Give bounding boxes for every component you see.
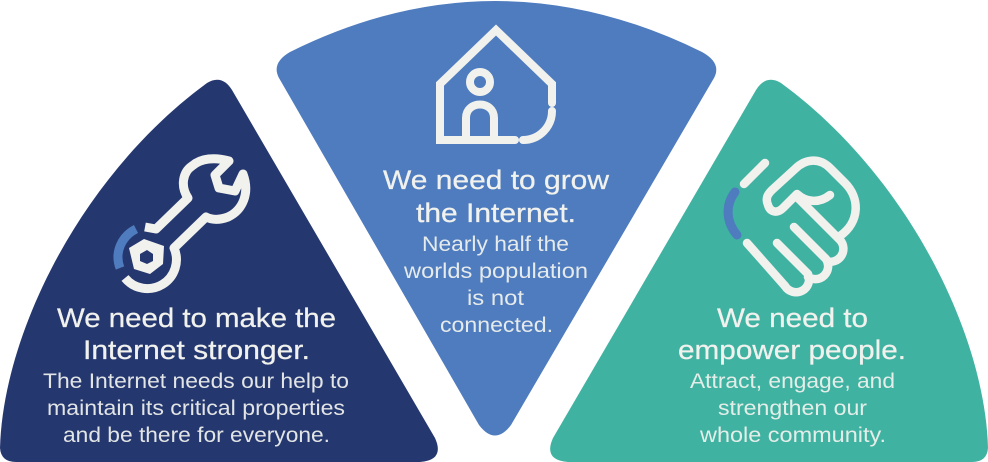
panel: empower people — [550, 80, 988, 462]
body text: empower people: whole community. — [699, 423, 886, 447]
heading: make the Internet stronger: We need to make the — [57, 303, 336, 333]
body text: empower people: Attract, engage, and — [690, 369, 895, 393]
heading: make the Internet stronger — [57, 303, 336, 365]
body text: make the Internet stronger: maintain its critical properties — [47, 396, 345, 420]
panel: make the Internet stronger — [0, 80, 438, 462]
icon: handshake — [728, 161, 856, 292]
body text: grow the Internet: is not — [467, 286, 524, 310]
icon: house with person — [440, 30, 552, 140]
heading: make the Internet stronger: Internet stronger. — [83, 335, 310, 365]
heading: empower people — [678, 303, 906, 365]
heading: empower people: empower people. — [678, 335, 906, 365]
body text: make the Internet stronger: and be there for everyone. — [63, 423, 330, 447]
heading: empower people: We need to — [717, 303, 868, 333]
panel shape: navy wedge — [0, 80, 438, 462]
body text: make the Internet stronger: The Internet needs our help to — [43, 369, 349, 393]
body text: make the Internet stronger — [43, 369, 349, 447]
body text: grow the Internet: Nearly half the — [422, 232, 569, 256]
panel shape: teal wedge — [550, 80, 988, 462]
heading: grow the Internet: the Internet. — [416, 198, 576, 228]
body text: grow the Internet — [403, 232, 588, 337]
heading: grow the Internet: We need to grow — [383, 165, 610, 195]
panel: grow the Internet — [277, 1, 716, 436]
panel shape: blue wedge — [277, 1, 716, 436]
body text: empower people — [690, 369, 895, 447]
body text: empower people: strengthen our — [718, 396, 867, 420]
body text: grow the Internet: worlds population — [403, 259, 588, 283]
heading: grow the Internet — [383, 165, 610, 228]
icon: wrench and nut — [118, 159, 246, 289]
body text: grow the Internet: connected. — [440, 313, 553, 337]
